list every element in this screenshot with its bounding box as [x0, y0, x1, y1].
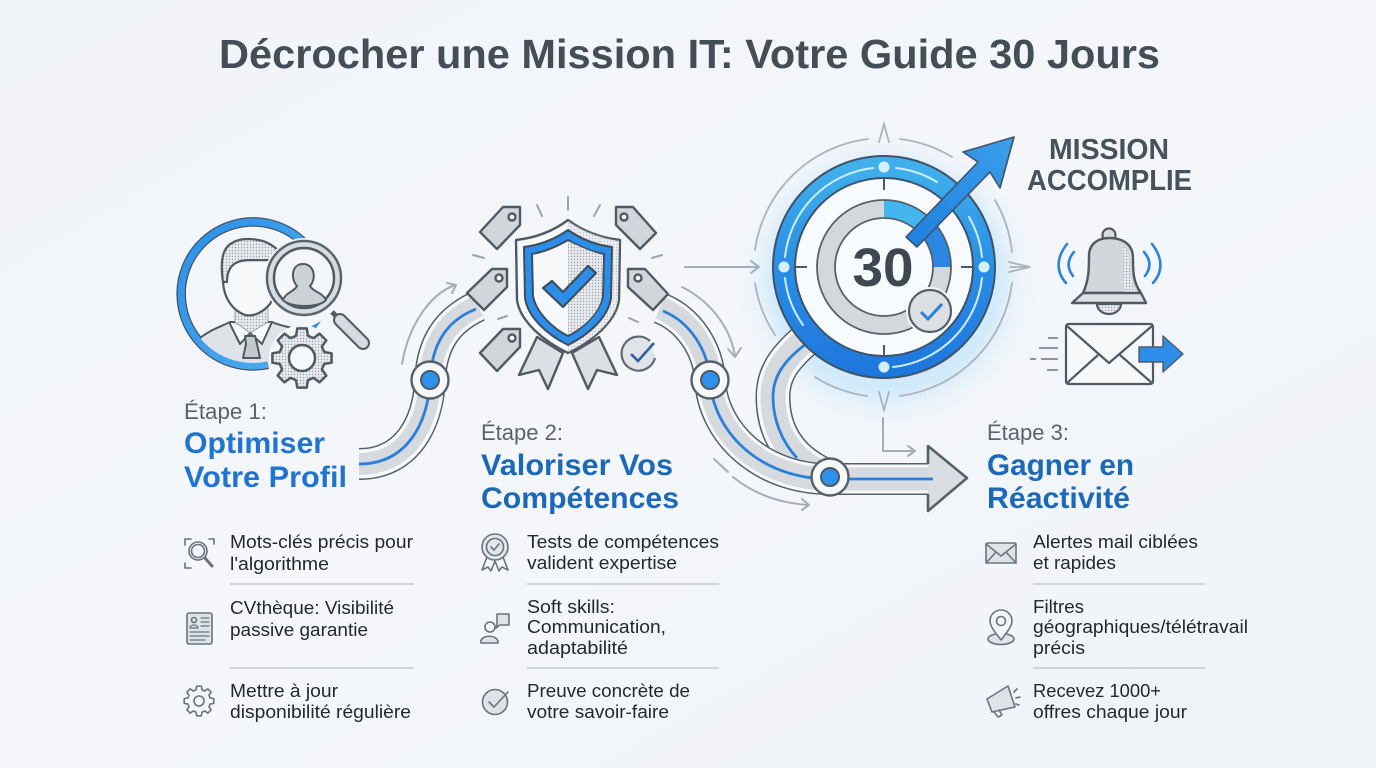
heading: step 2: [481, 420, 679, 515]
icon: map pin: [988, 610, 1014, 644]
icon: shield badge with skill tags: [467, 197, 668, 389]
heading: step 2: Étape 2:: [481, 420, 563, 445]
icon: profile with magnifier and gear: [181, 222, 363, 391]
item: availability: [184, 681, 411, 722]
heading: step 2: Compétences: [481, 482, 679, 515]
item: location filters: [988, 597, 1248, 658]
item: proof: Preuve concrète de: [527, 681, 690, 701]
item: skill tests: Tests de compétences: [527, 532, 719, 552]
icon: rosette: [482, 534, 508, 571]
icon: small gear: [184, 686, 214, 716]
item: keywords: [185, 532, 413, 574]
icon: small envelope: [986, 543, 1016, 563]
node 3: [812, 458, 848, 496]
rising arrow: [906, 137, 1014, 247]
item: daily offers: offres chaque jour: [1033, 702, 1187, 722]
item: mail alerts: Alertes mail ciblées: [1033, 532, 1198, 552]
item: keywords: l'algorithme: [230, 554, 329, 574]
icon: ringing bell: [1059, 228, 1160, 314]
panel: step 3: [986, 420, 1248, 722]
path segment: target to final arrow: [773, 332, 832, 478]
icon ring: [181, 222, 303, 366]
journey path: ribbons connecting the three steps: [359, 306, 967, 511]
heading: step 1: [184, 399, 347, 494]
heading: step 3: Gagner en: [987, 449, 1134, 482]
node 1: [412, 362, 448, 398]
thin direction arrows: [402, 261, 915, 510]
item: keywords: Mots-clés précis pour: [230, 532, 413, 552]
label: mission accomplie: [1027, 134, 1192, 197]
heading: step 3: [987, 420, 1134, 515]
path segment: step 2 to final arrow with arrowhead: [660, 308, 967, 511]
item: daily offers: [987, 681, 1187, 722]
icon: scan magnifier: [185, 539, 214, 568]
gauge: [817, 200, 951, 334]
heading: step 1: Optimiser: [184, 427, 325, 460]
icon: 30-day target with rising arrow: [755, 124, 1030, 410]
item: soft skills: Communication,: [527, 617, 666, 637]
heading: step 3: Réactivité: [987, 482, 1130, 515]
heading: step 3: Étape 3:: [987, 420, 1069, 445]
number 30: 30: [852, 238, 914, 298]
heading: step 1: Étape 1:: [184, 399, 267, 424]
panel: step 1: [184, 399, 414, 722]
title: Décrocher une Mission IT: Votre Guide 30 Jours: [219, 31, 1160, 77]
item: proof: [482, 681, 690, 722]
item: skill tests: [482, 532, 719, 573]
icon: check circle: [482, 690, 508, 714]
item: mail alerts: [986, 532, 1198, 573]
rays: [473, 197, 662, 322]
icon: magnifier: [264, 238, 363, 343]
item: availability: disponibilité régulière: [230, 702, 411, 722]
ribbons: [519, 337, 617, 389]
path segment: step 1 to step 2: [359, 306, 478, 464]
item: soft skills: Soft skills:: [527, 597, 615, 617]
blue ring fill: [784, 167, 984, 367]
item: mail alerts: et rapides: [1033, 553, 1116, 573]
label: mission accomplie: MISSION: [1049, 134, 1169, 166]
item: availability: Mettre à jour: [230, 681, 338, 701]
heading: step 1: Votre Profil: [184, 461, 347, 494]
node 2: [692, 362, 728, 398]
check badge: [906, 287, 954, 335]
panel: step 2: [481, 420, 719, 722]
item: soft skills: [481, 597, 666, 658]
outer compass arcs: [755, 124, 1030, 410]
icon: person with speech bubble: [481, 614, 509, 643]
icon: person bust: [199, 238, 292, 363]
item: soft skills: adaptabilité: [527, 638, 628, 658]
item: location filters: géographiques/télétravail: [1033, 617, 1248, 637]
item: cv library: passive garantie: [230, 620, 368, 640]
item: skill tests: valident expertise: [527, 553, 677, 573]
icon: megaphone: [987, 686, 1020, 717]
item: cv library: CVthèque: Visibilité: [230, 598, 394, 618]
ring ticks: [795, 178, 973, 356]
label: mission accomplie: ACCOMPLIE: [1027, 165, 1192, 197]
blue ring: [784, 167, 984, 367]
item: daily offers: Recevez 1000+: [1033, 681, 1161, 701]
icon: gear: [269, 325, 335, 391]
item: proof: votre savoir-faire: [527, 702, 669, 722]
icon: resume document: [187, 613, 212, 644]
heading: step 2: Valoriser Vos: [481, 449, 673, 482]
item: location filters: précis: [1033, 638, 1085, 658]
skill tags: [467, 207, 668, 371]
shield: [516, 220, 620, 353]
item: cv library: [187, 598, 394, 644]
item: location filters: Filtres: [1033, 597, 1084, 617]
small check circle: [622, 337, 655, 371]
ring dots: [778, 162, 990, 372]
ring highlights: [785, 168, 982, 367]
icon: envelope with send arrow: [1030, 324, 1183, 384]
